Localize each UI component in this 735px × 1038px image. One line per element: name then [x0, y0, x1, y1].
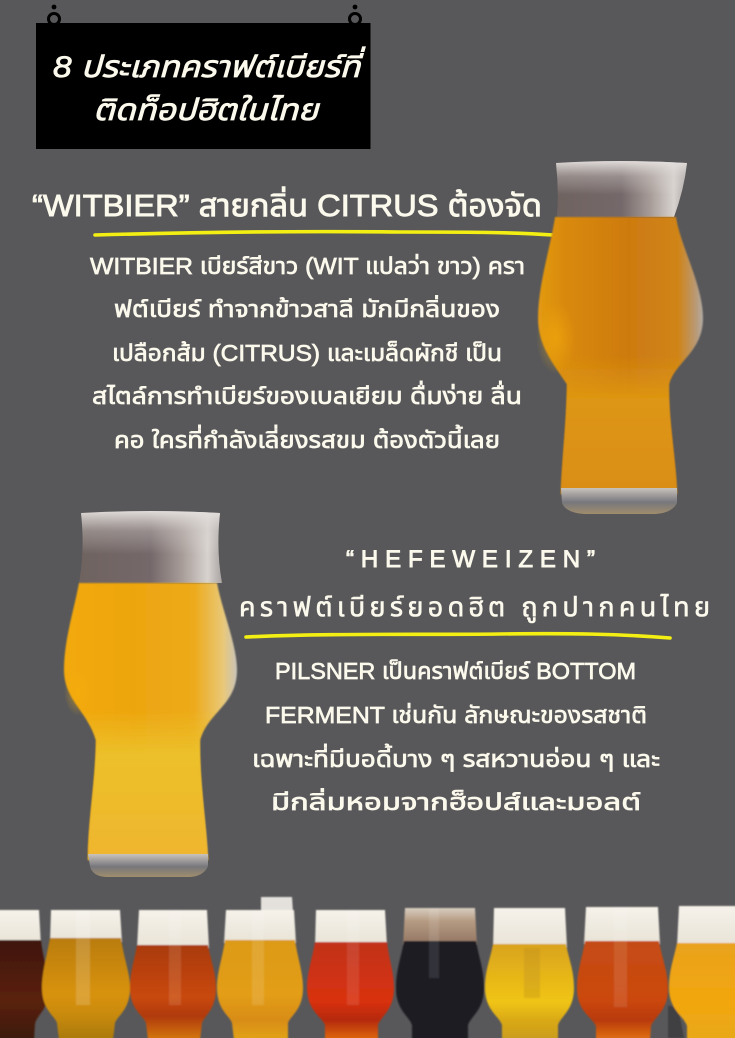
title text: ติดท็อปฮิตในไทย	[93, 94, 320, 127]
title text	[53, 46, 365, 127]
title sign	[36, 5, 370, 149]
text: hefeweizen description: เฉพาะที่มีบอดี้บาง ๆ รสหวานอ่อน ๆ และ	[252, 743, 660, 772]
icon: right hanger	[350, 5, 360, 24]
text: hefeweizen description: มีกลิ่มหอมจากฮ็อปส์และมอลต์	[271, 787, 641, 815]
section: witbier heading: “WITBIER” สายกลิ่น CITRUS ต้องจัด	[32, 186, 542, 223]
text: witbier description: สไตล์การทำเบียร์ของเบลเยียม ดื่มง่าย ลื่น	[92, 380, 522, 409]
section: hefeweizen heading	[239, 546, 710, 623]
text: witbier description: เปลือกส้ม (CITRUS) และเมล็ดผักชี เป็น	[112, 340, 502, 366]
text: witbier description: WITBIER เบียร์สีขาว (WIT แปลว่า ขาว) ครา	[90, 253, 525, 279]
glass: copper	[130, 910, 216, 1038]
icon: left hanger	[48, 5, 60, 24]
image: witbier glass	[536, 161, 703, 514]
section: hefeweizen heading: คราฟต์เบียร์ยอดฮิต ถูกปากคนไทย	[239, 592, 710, 623]
underline: hefeweizen	[246, 634, 670, 638]
glass: lager	[485, 908, 574, 1038]
glass: stout	[396, 908, 484, 1038]
image: hefeweizen glass	[64, 511, 237, 877]
sign board	[36, 23, 370, 149]
glass: golden amber	[217, 897, 303, 1038]
glass: orange red	[577, 907, 668, 1038]
glass: red	[307, 910, 394, 1038]
glass: amber	[42, 910, 130, 1038]
title text: 8 ประเภทคราฟต์เบียร์ที่	[53, 46, 365, 84]
text: hefeweizen description: FERMENT เช่นกัน ลักษณะของรสชาติ	[265, 702, 647, 728]
text: witbier description	[90, 253, 525, 453]
text: hefeweizen description	[252, 658, 660, 815]
glass: right amber	[668, 906, 735, 1038]
glass: dark brown	[0, 910, 49, 1038]
text: witbier description: คอ ใครที่กำลังเลี่ยงรสขม ต้องตัวนี้เลย	[114, 424, 500, 453]
row of small glasses	[0, 897, 735, 1038]
section: hefeweizen heading: “HEFEWEIZEN”	[346, 546, 595, 573]
text: witbier description: ฟต์เบียร์ ทำจากข้าวสาลี มักมีกลิ่นของ	[114, 294, 500, 322]
underline: witbier	[95, 232, 553, 235]
text: hefeweizen description: PILSNER เป็นคราฟต์เบียร์ BOTTOM	[275, 658, 636, 684]
